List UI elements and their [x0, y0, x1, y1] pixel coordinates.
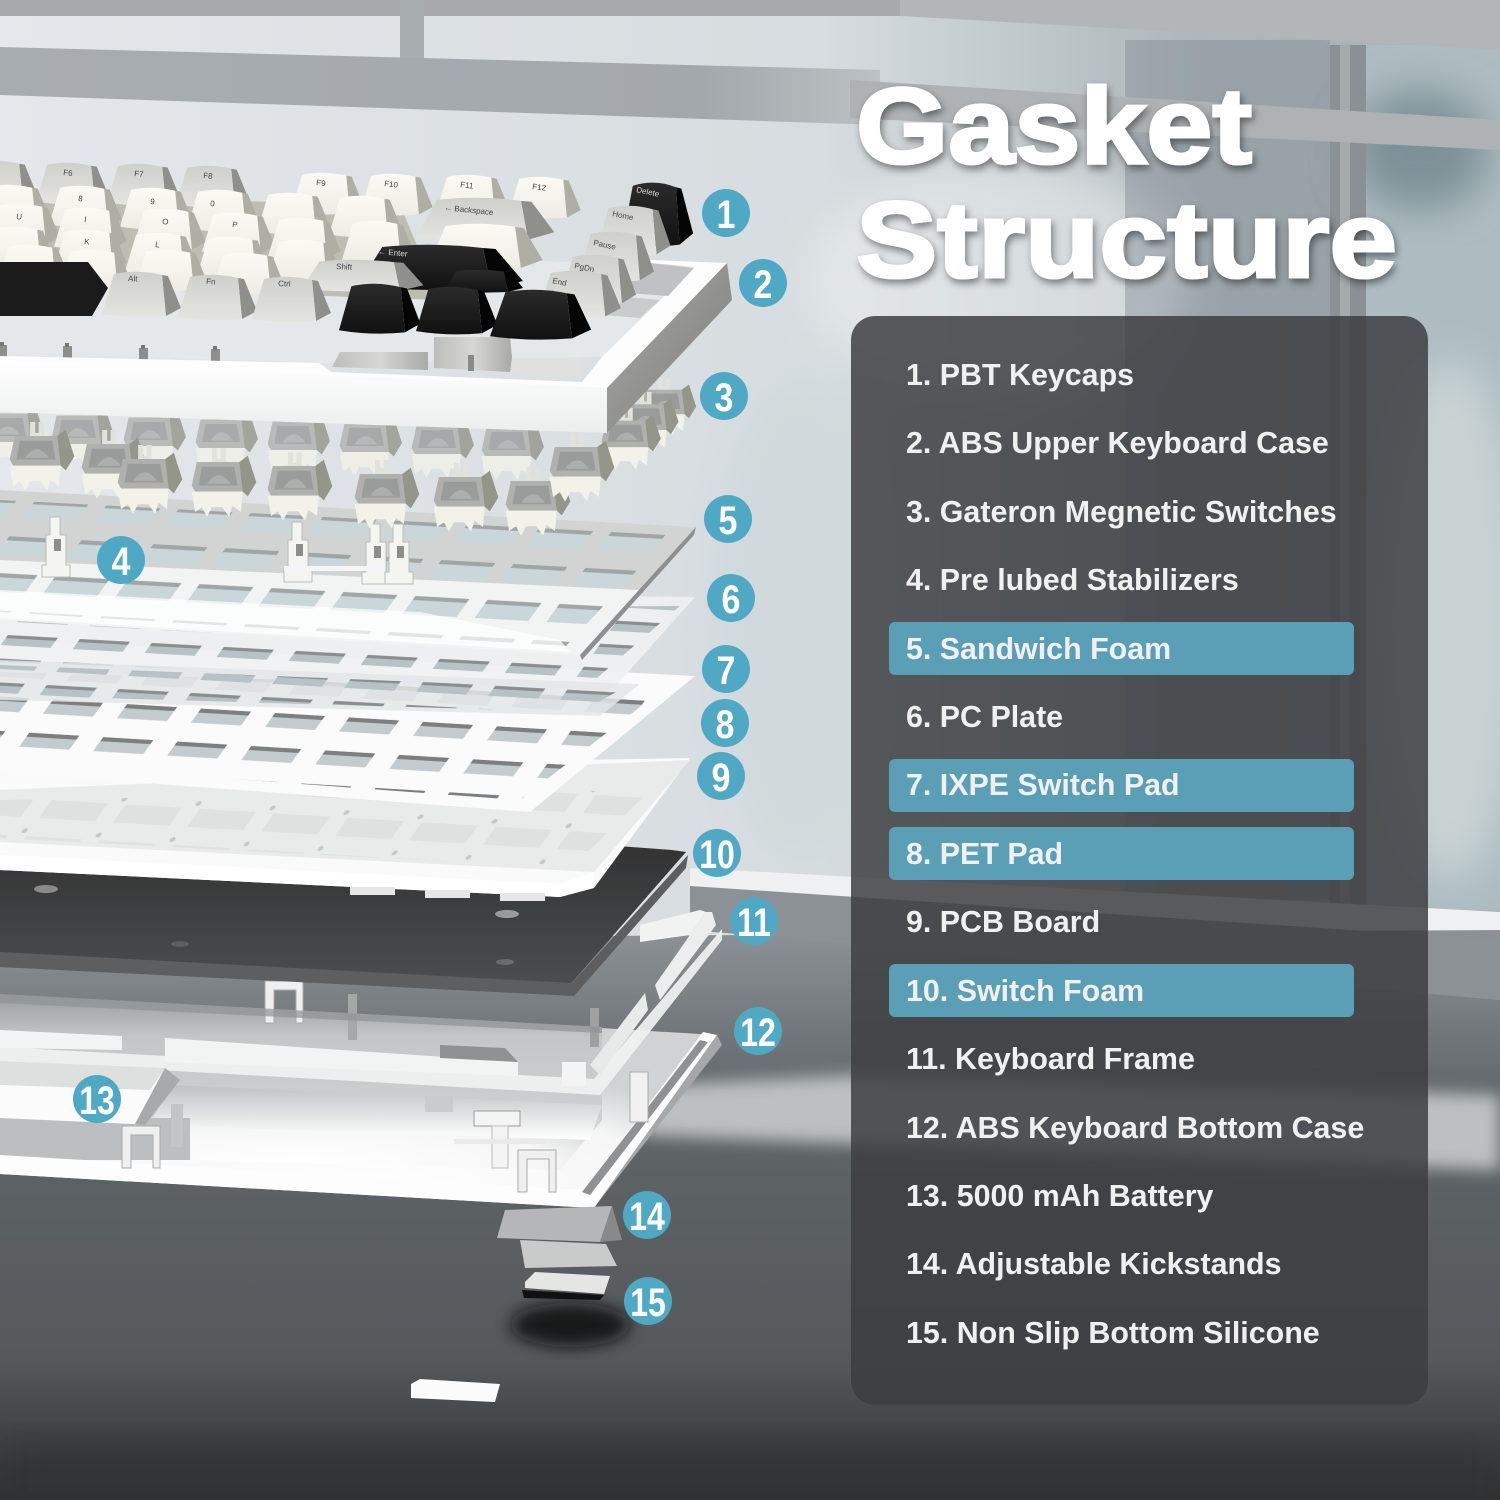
number badges: 11	[737, 900, 771, 945]
part: kickstand	[497, 1206, 622, 1268]
list text: 10. Switch Foam	[906, 974, 1144, 1008]
number badges: 15	[630, 1280, 666, 1325]
home row: K	[84, 237, 91, 247]
number row: ← Backspace	[444, 203, 494, 217]
number badges: 2	[754, 261, 772, 307]
bottom letter row: End	[552, 276, 567, 288]
layer: IXPE switch pad and PC plate	[0, 590, 695, 716]
title	[856, 65, 1397, 300]
number row	[0, 185, 670, 256]
function row: F8	[203, 171, 214, 181]
list text: 9. PCB Board	[906, 905, 1100, 939]
number row: 8	[78, 194, 84, 204]
home row	[0, 227, 636, 305]
loose foot	[411, 1379, 500, 1402]
number badges: 6	[722, 576, 740, 622]
number badges: 8	[716, 701, 734, 747]
space row: Alt	[128, 274, 138, 284]
function row: Delete	[636, 185, 661, 199]
list text: 2. ABS Upper Keyboard Case	[906, 426, 1329, 460]
list text: 6. PC Plate	[906, 700, 1063, 734]
list text: 5. Sandwich Foam	[906, 632, 1171, 666]
bottom letter row	[0, 245, 621, 317]
list text: 7. IXPE Switch Pad	[906, 768, 1180, 802]
number row: 9	[150, 197, 156, 207]
part: silicone foot	[411, 1272, 630, 1402]
function row: F6	[63, 168, 74, 178]
number badges: 5	[719, 497, 737, 543]
list text: 12. ABS Keyboard Bottom Case	[906, 1111, 1364, 1145]
list text: 14. Adjustable Kickstands	[906, 1247, 1282, 1281]
list text: 15. Non Slip Bottom Silicone	[906, 1316, 1320, 1350]
function row: F7	[134, 169, 145, 179]
space row	[0, 262, 591, 340]
home row: ← Enter	[378, 247, 408, 259]
title: Structure	[856, 179, 1397, 300]
number badges: 12	[740, 1010, 776, 1055]
number badges: 14	[629, 1194, 665, 1239]
layer: PET pad	[0, 640, 695, 812]
internal pillars	[122, 981, 648, 1192]
top letter row: U	[16, 212, 23, 222]
space row: Ctrl	[278, 279, 291, 289]
home row: L	[155, 240, 161, 250]
top letter row: O	[162, 217, 169, 227]
list text: 1. PBT Keycaps	[906, 358, 1134, 392]
layer: sandwich foam	[0, 490, 696, 660]
title: Gasket	[856, 65, 1252, 186]
number row: 0	[210, 199, 216, 209]
layer: keycaps	[0, 161, 693, 340]
top letter row: I	[84, 215, 87, 224]
layer: black foam	[0, 800, 688, 996]
layer: PCB board	[0, 758, 690, 901]
number badges: 4	[112, 538, 131, 584]
function row: F9	[316, 178, 327, 188]
home row: PgDn	[574, 261, 595, 274]
function row: F11	[460, 180, 474, 191]
number badges: 10	[699, 832, 735, 877]
number badges: 13	[79, 1078, 115, 1123]
layer: switches	[0, 378, 696, 536]
layer: bottom case	[0, 981, 722, 1208]
space row: Fn	[206, 277, 216, 286]
keycap base shadow	[0, 195, 440, 300]
number badges	[73, 189, 787, 1325]
part: battery	[0, 1061, 180, 1125]
list text: 13. 5000 mAh Battery	[906, 1179, 1214, 1213]
panel: parts list	[851, 316, 1428, 1405]
exploded keyboard illustration	[0, 161, 732, 1402]
list text: 3. Gateron Megnetic Switches	[906, 495, 1337, 529]
function row: F10	[384, 179, 399, 190]
top letter row	[0, 204, 654, 282]
part: stabilizers	[42, 517, 413, 584]
list text	[906, 358, 1364, 1350]
number badges: 3	[715, 374, 733, 420]
layer: keyboard frame	[0, 910, 722, 1095]
function row	[0, 161, 693, 246]
bottom letter row: Shift	[336, 262, 353, 272]
number badges: 9	[712, 754, 730, 800]
list text: 8. PET Pad	[906, 837, 1063, 871]
number badges: 1	[717, 191, 735, 237]
list text: 11. Keyboard Frame	[906, 1042, 1195, 1076]
number badges: 7	[717, 647, 735, 693]
highlight bars	[889, 622, 1354, 1017]
top letter row: Pause	[593, 238, 617, 252]
list text: 4. Pre lubed Stabilizers	[906, 563, 1239, 597]
number row: Home	[612, 209, 635, 223]
function row: F12	[532, 182, 547, 193]
top letter row: P	[232, 220, 238, 230]
layer: upper case	[0, 240, 732, 433]
